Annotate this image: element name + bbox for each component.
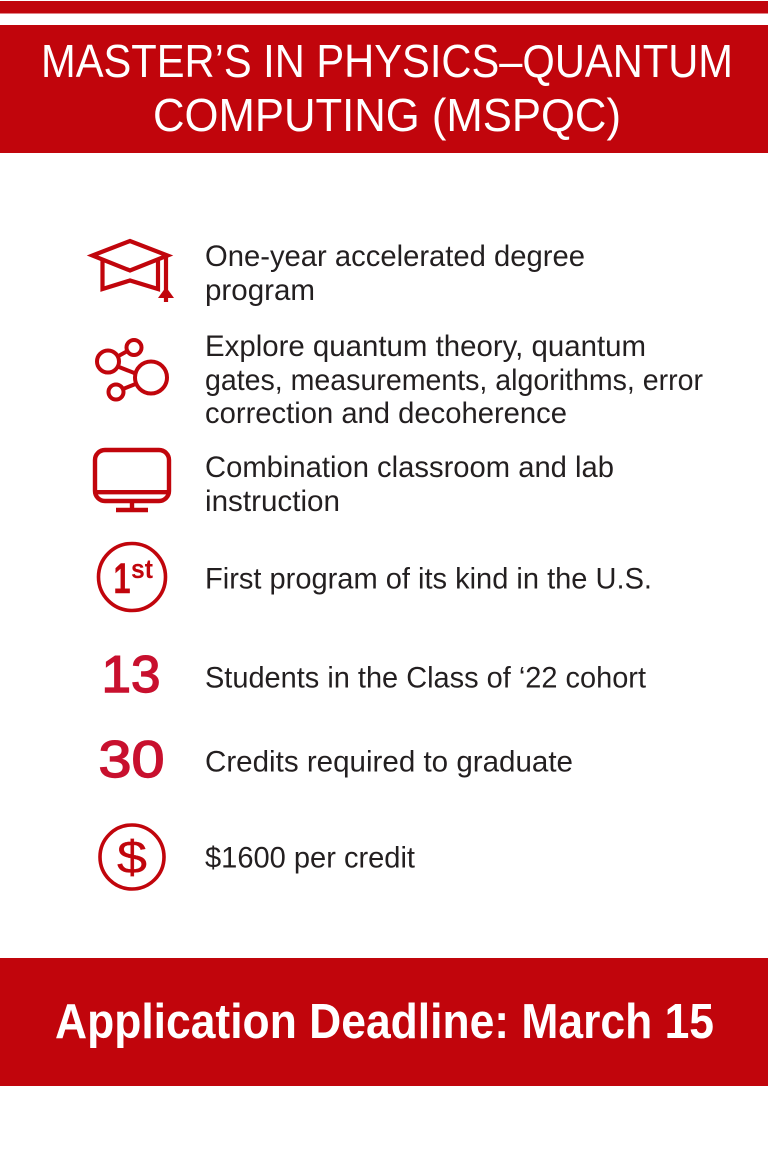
text: credits: Credits required to graduate <box>205 746 573 778</box>
text: quantum topics: Explore quantum theory, quantum <box>205 330 646 363</box>
text: classroom and lab: Combination classroom and lab <box>205 451 614 484</box>
icon: graduation cap <box>92 241 174 302</box>
icon: first badge <box>98 544 166 610</box>
text: students: Students in the Class of ‘22 cohort <box>205 662 646 694</box>
top accent bar <box>0 1 768 14</box>
text: quantum topics: gates, measurements, algorithms, error <box>205 364 703 397</box>
icon: computer monitor <box>95 450 169 510</box>
icon: connected nodes <box>97 340 167 400</box>
text: quantum topics: correction and decoherence <box>205 397 567 430</box>
text: quantum topics <box>205 330 703 430</box>
icon: first badge: st <box>131 554 153 584</box>
text: accelerated degree <box>205 240 585 307</box>
title line 2: COMPUTING (MSPQC) <box>153 89 621 141</box>
text: accelerated degree: program <box>205 274 315 307</box>
text: classroom and lab <box>205 451 614 518</box>
text: cost: $1600 per credit <box>205 842 415 874</box>
icon: dollar badge <box>100 825 164 889</box>
text: accelerated degree: One-year accelerated degree <box>205 240 585 273</box>
icon: first badge: 1 <box>114 555 130 603</box>
footer banner <box>0 958 768 1086</box>
number: 13: 13 <box>102 646 160 704</box>
number: 30: 30 <box>98 731 164 789</box>
text: first program: First program of its kind in the U.S. <box>205 562 652 596</box>
deadline text: Application Deadline: March 15 <box>55 995 714 1049</box>
icon: dollar badge: $ <box>117 831 147 883</box>
header banner <box>0 25 768 153</box>
text: classroom and lab: instruction <box>205 485 340 518</box>
